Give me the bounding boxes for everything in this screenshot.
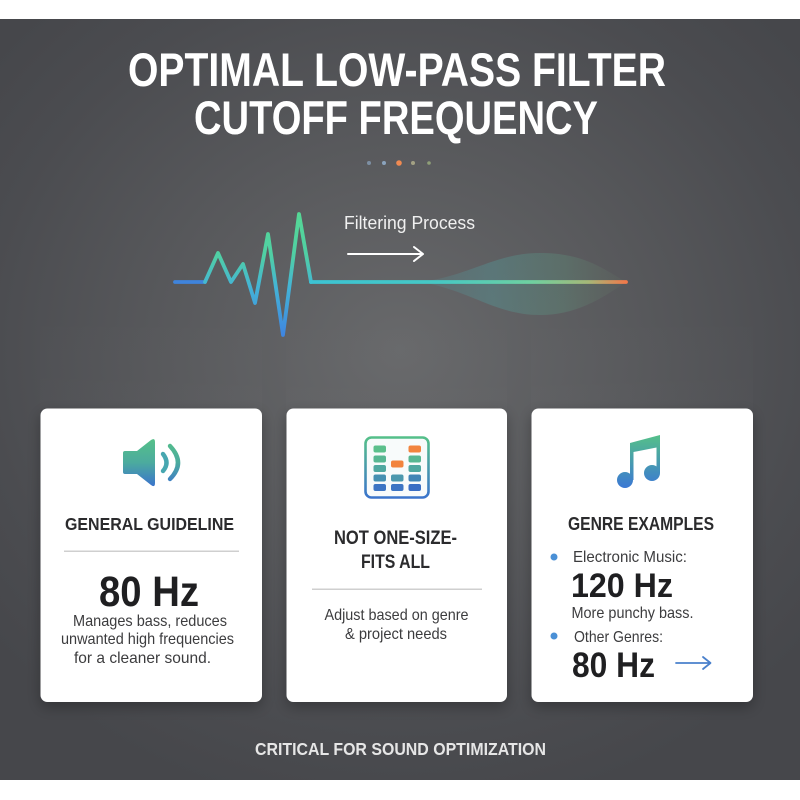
waveform xyxy=(175,214,626,335)
description xyxy=(61,613,234,667)
title: CUTOFF FREQUENCY xyxy=(194,91,598,144)
description: & project needs xyxy=(345,626,447,643)
label: other genres: Other Genres: xyxy=(574,629,663,646)
label: electronic music: Electronic Music: xyxy=(573,549,687,566)
filtered signal glow shape xyxy=(420,253,626,315)
arrow: filtering direction xyxy=(348,247,423,261)
value: 80 Hz: 80 Hz xyxy=(572,646,655,685)
value: 120 Hz: 120 Hz xyxy=(571,567,673,605)
heading: not one-size-fits all xyxy=(334,528,457,573)
description: for a cleaner sound. xyxy=(74,650,211,667)
panel: not one-size-fits all xyxy=(286,408,507,702)
icon: equalizer xyxy=(366,438,428,498)
value: 80 Hz: 80 Hz xyxy=(99,568,199,616)
icon: music note xyxy=(617,435,660,488)
bullet: electronic music xyxy=(550,554,558,560)
footer caption: CRITICAL FOR SOUND OPTIMIZATION xyxy=(255,739,546,759)
title: OPTIMAL LOW-PASS FILTER xyxy=(128,43,666,96)
panel: genre examples xyxy=(532,408,753,702)
description: Manages bass, reduces xyxy=(73,613,227,630)
heading: general guideline: GENERAL GUIDELINE xyxy=(65,514,234,534)
divider xyxy=(64,550,239,552)
description: Adjust based on genre xyxy=(324,607,469,624)
heading: not one-size-fits all: FITS ALL xyxy=(361,552,430,573)
note: more punchy bass: More punchy bass. xyxy=(572,605,694,622)
heading: genre examples: GENRE EXAMPLES xyxy=(568,514,714,534)
description: unwanted high frequencies xyxy=(61,631,234,648)
arrow: other genres xyxy=(676,657,710,669)
panel: general guideline xyxy=(40,408,262,702)
icon: speaker xyxy=(123,439,178,486)
decorative dots row xyxy=(367,160,431,166)
description xyxy=(324,607,469,643)
bullet: other genres xyxy=(550,632,558,640)
faint glass panels behind cards xyxy=(40,300,753,410)
filtering process label: Filtering Process xyxy=(344,213,475,233)
divider xyxy=(312,588,482,590)
title xyxy=(128,43,666,144)
heading: not one-size-fits all: NOT ONE-SIZE- xyxy=(334,528,457,549)
